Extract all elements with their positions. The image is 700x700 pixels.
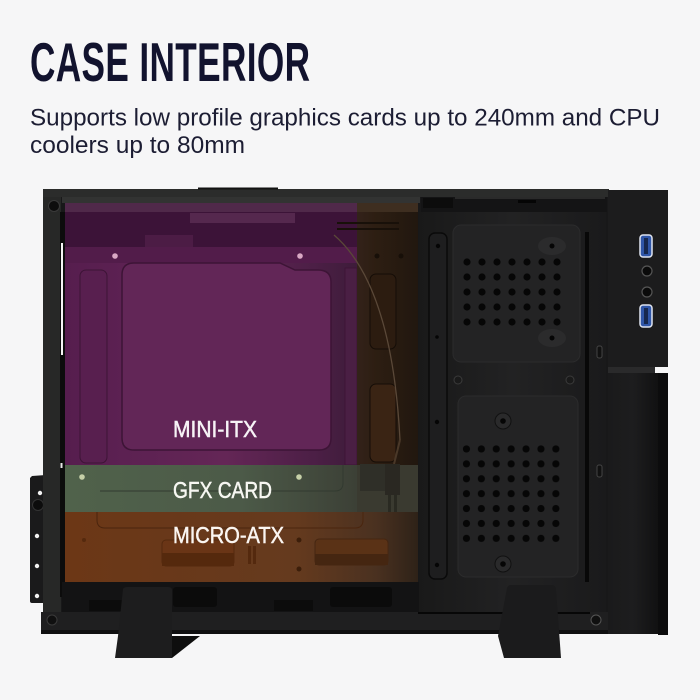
front panel lower [608,367,668,635]
title: CASE INTERIOR [30,31,310,93]
icon: audio jack top [642,266,652,276]
subtitle text: Supports low profile graphics cards up to 240mm and CPU [30,104,660,132]
icon: audio jack bottom [642,287,652,297]
left side bracket [30,475,48,603]
icon: usb port bottom [640,305,652,327]
subtitle text [30,104,660,159]
computer case [30,188,668,658]
amber side zone [334,203,418,512]
front panel upper [608,190,668,367]
vent holes upper [460,254,564,330]
subtitle text: coolers up to 80mm [30,132,245,159]
right foot [498,585,561,658]
purple mini-itx zone [65,203,357,465]
rear plate with ventilation [418,197,607,614]
icon: usb port top [640,235,652,257]
label: mini-itx: MINI-ITX [173,416,257,442]
label: gfx card: GFX CARD [173,477,272,503]
green gfx card zone [65,464,418,516]
label: micro-atx: MICRO-ATX [173,522,284,548]
orange micro-atx zone [65,512,418,582]
left foot [115,587,200,658]
vent holes lower [459,442,563,546]
chassis frame [41,188,609,634]
